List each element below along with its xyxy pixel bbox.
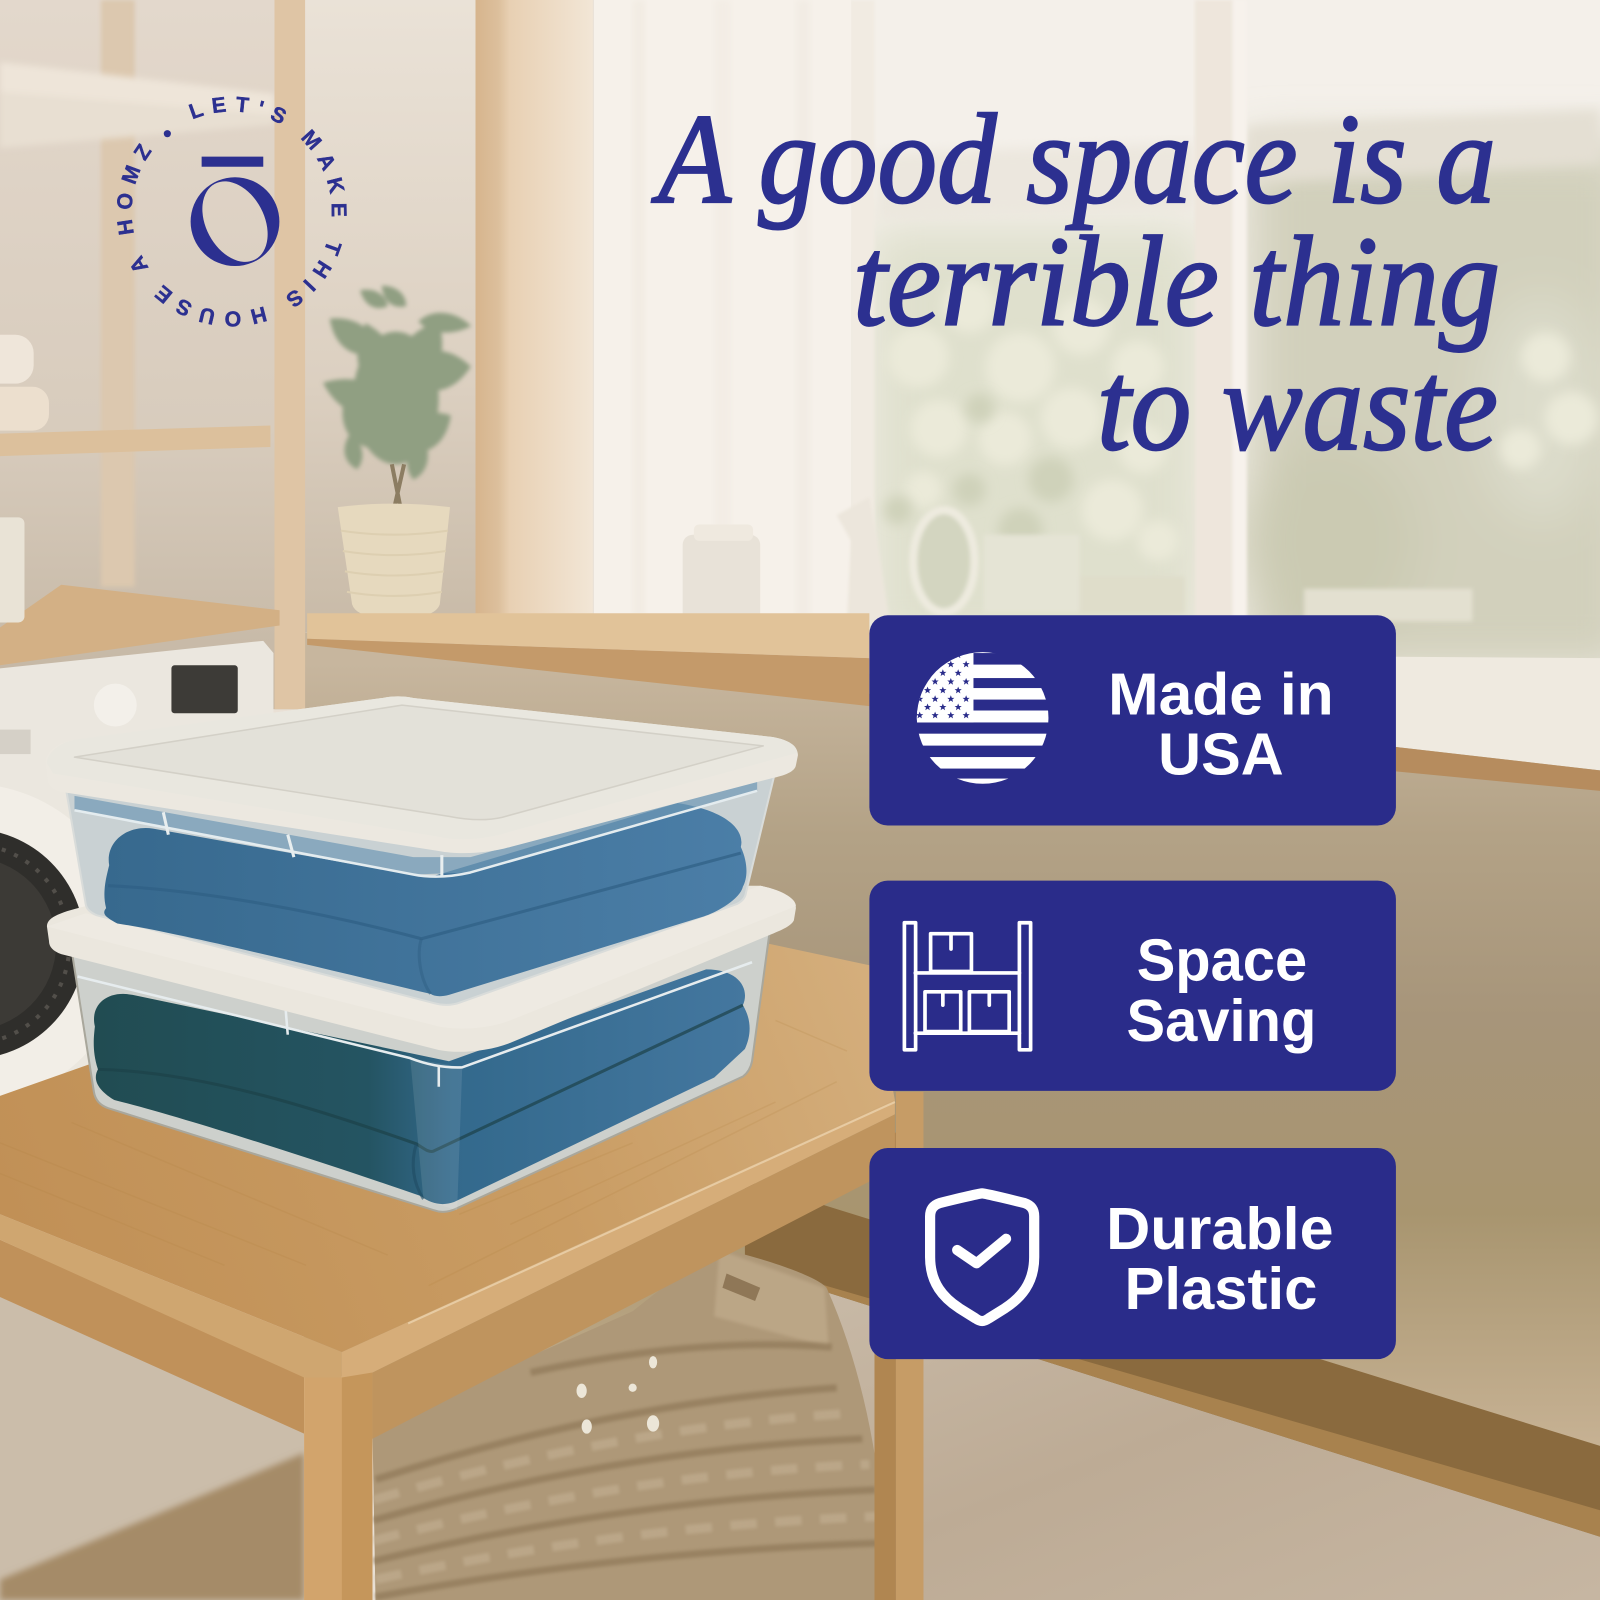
wall below window <box>304 633 1600 1469</box>
badge: Durable Plastic <box>869 1148 1396 1359</box>
logo ring <box>191 177 279 266</box>
window frame mullions <box>850 0 1247 622</box>
window with garden view <box>850 0 1600 673</box>
separator dot <box>164 130 171 137</box>
potted plant <box>317 280 474 619</box>
floor <box>0 1181 1600 1600</box>
curtain <box>594 0 851 618</box>
wooden window sill <box>307 613 869 706</box>
folded towels on shelf <box>0 335 49 431</box>
badge label: Saving <box>1127 987 1316 1054</box>
badge label: Space <box>1137 927 1307 994</box>
badge label: Durable <box>1106 1195 1334 1262</box>
flange seen through plastic <box>74 778 757 874</box>
flowering shrubs <box>888 280 1598 561</box>
white sill and wooden trim, right <box>869 653 1600 791</box>
frosted corner panel <box>410 1058 462 1210</box>
upper lid <box>46 696 798 853</box>
heading <box>651 87 1500 477</box>
wooden column <box>474 0 593 623</box>
badge: Space Saving <box>869 881 1396 1091</box>
icon: shield with check mark <box>930 1193 1034 1321</box>
badge label: USA <box>1158 720 1284 787</box>
upper folded blanket <box>104 803 746 996</box>
icon: storage rack with boxes <box>904 923 1031 1050</box>
jar and spray bottle on sill <box>683 497 890 628</box>
logo bar <box>202 157 263 167</box>
upper box body <box>66 774 774 1005</box>
heading: terrible thing <box>853 209 1500 352</box>
wooden table <box>0 944 923 1600</box>
badge label <box>1108 660 1334 787</box>
roof band in garden <box>1247 109 1600 184</box>
small wicker basket <box>0 517 24 622</box>
lower storage box with fabric <box>47 886 796 1212</box>
washing machine <box>0 641 273 1104</box>
heading: to waste <box>1097 334 1498 477</box>
circular tagline: LET'S MAKE THIS HOUSE A HOMZ <box>117 96 347 327</box>
badge label <box>1106 1195 1334 1322</box>
planters on window ledge <box>913 510 1472 621</box>
badge: Made in USA <box>869 615 1396 826</box>
badge label: Plastic <box>1124 1255 1317 1322</box>
lower box body <box>71 934 769 1212</box>
heading: A good space is a <box>651 87 1496 230</box>
lower folded blanket <box>94 969 750 1204</box>
badge label: Made in <box>1108 660 1334 727</box>
logo: circular badge <box>117 96 347 327</box>
icon: american flag <box>916 652 1048 784</box>
badge label <box>1127 927 1316 1054</box>
wicker laundry basket <box>372 1247 886 1600</box>
lower lid <box>47 886 796 1052</box>
wall behind plant <box>304 0 476 633</box>
left shelving unit <box>0 0 305 709</box>
upper storage box with fabric <box>46 696 798 1005</box>
